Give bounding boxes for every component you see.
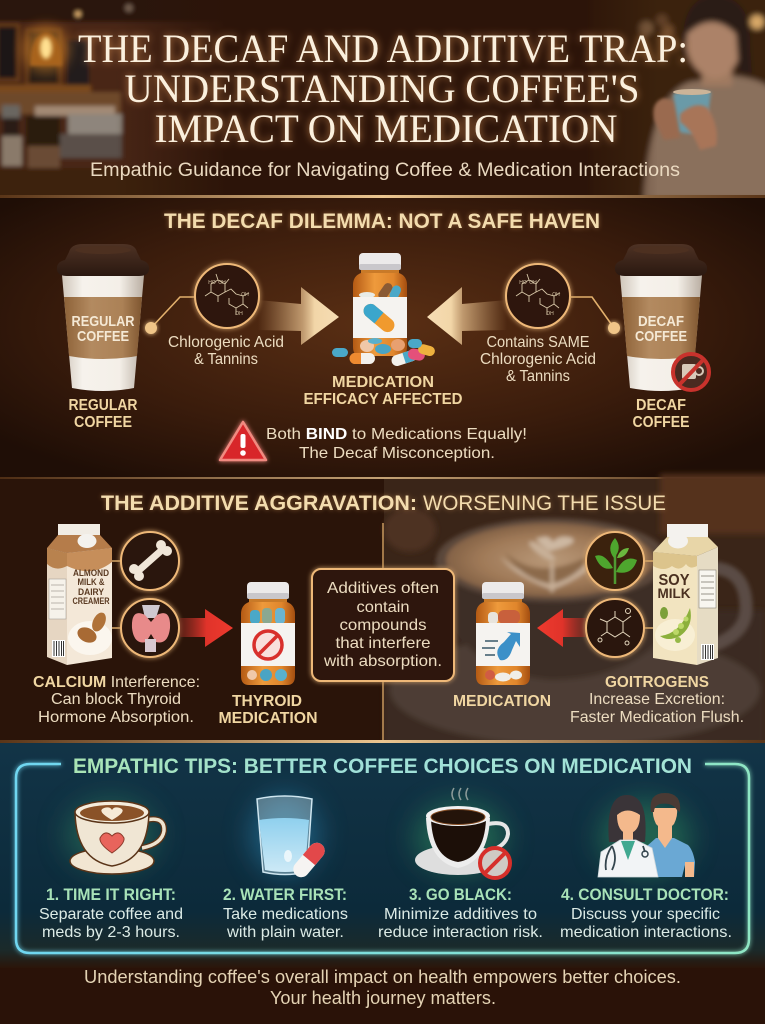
- contains same text: Contains SAME: [486, 334, 590, 351]
- goitrogens text: Faster Medication Flush.: [570, 709, 744, 726]
- bone icon circle: [112, 532, 179, 628]
- regular coffee label: REGULAR: [68, 397, 138, 414]
- contains same text: [480, 334, 596, 385]
- tip 4: Discuss your specific: [571, 906, 720, 923]
- calcium text: [33, 674, 200, 726]
- panel: footer: [0, 967, 765, 1024]
- subtitle: Empathic Guidance for Navigating Coffee & Medication Interactions: [90, 160, 680, 181]
- soy milk carton: SOY: [658, 572, 690, 589]
- goitrogens text: [570, 674, 744, 726]
- molecule circle right: [506, 264, 570, 328]
- divider: [0, 740, 765, 743]
- goitrogens text: Increase Excretion:: [589, 691, 725, 708]
- tip 4: [560, 885, 732, 941]
- tip 1: Separate coffee and: [39, 906, 183, 923]
- fade overlay into title area: [0, 0, 765, 196]
- title: [78, 26, 688, 151]
- thyroid medication label: THYROID: [232, 693, 302, 710]
- footer text: [84, 967, 681, 1008]
- man: [647, 793, 695, 877]
- callout box: [312, 569, 454, 681]
- latte background photo: [384, 474, 765, 746]
- warning text: Both BIND to Medications Equally!: [266, 426, 527, 443]
- molecule circle left: OH: [241, 292, 249, 298]
- red arrow left: [180, 609, 233, 647]
- tip 1: [39, 885, 183, 941]
- heading: WORSENING THE ISSUE: [423, 492, 666, 515]
- tips frame: [16, 764, 749, 953]
- panel: the additive aggravation: [0, 474, 765, 746]
- icon: glass of water with pill: [257, 796, 328, 880]
- medication bottle with arrow: [476, 582, 530, 685]
- title: IMPACT ON MEDICATION: [154, 106, 618, 151]
- regular coffee label: [68, 397, 138, 431]
- heading: THE ADDITIVE AGGRAVATION:: [101, 492, 417, 515]
- molecule circle left: HO: [208, 280, 216, 286]
- contains same text: & Tannins: [506, 368, 570, 385]
- tip 4: medication interactions.: [560, 924, 732, 941]
- footer text: Understanding coffee's overall impact on health empowers better choices.: [84, 967, 681, 987]
- footer text: Your health journey matters.: [270, 988, 496, 1008]
- thyroid medication bottle: [241, 582, 295, 685]
- tip 2: Take medications: [223, 906, 348, 923]
- divider: [0, 477, 765, 479]
- panel: empathic tips: [0, 743, 765, 968]
- icon: coffee with heart: [70, 801, 164, 874]
- tip 2: [223, 885, 348, 941]
- warning text: The Decaf Misconception.: [299, 445, 495, 462]
- thyroid medication label: MEDICATION: [218, 710, 318, 727]
- tip 3: 3. GO BLACK:: [409, 885, 512, 904]
- tip 3: [378, 885, 543, 941]
- calcium text: Hormone Absorption.: [38, 709, 194, 726]
- tip 1: meds by 2-3 hours.: [42, 924, 180, 941]
- medication efficacy label: MEDICATION: [332, 374, 434, 391]
- panel: header: [0, 0, 765, 200]
- tip 3: reduce interaction risk.: [378, 924, 543, 941]
- molecule circle left: OH: [235, 311, 243, 317]
- soy milk carton: [653, 524, 718, 665]
- divider: [0, 195, 765, 198]
- molecule circle left: OH: [218, 280, 226, 286]
- regular coffee cup: COFFEE: [77, 328, 129, 345]
- callout box: with absorption.: [323, 653, 442, 670]
- molecule circle right: HO: [519, 280, 527, 286]
- decaf coffee label: COFFEE: [632, 414, 690, 431]
- medication efficacy label: [304, 374, 462, 408]
- decaf coffee label: [632, 397, 690, 431]
- chlorogenic text left: Chlorogenic Acid: [168, 334, 284, 351]
- warning icon: [220, 422, 266, 460]
- title: UNDERSTANDING COFFEE'S: [124, 66, 640, 111]
- thyroid medication label: [218, 693, 318, 727]
- tip 2: 2. WATER FIRST:: [223, 885, 347, 904]
- tip 3: Minimize additives to: [384, 906, 537, 923]
- regular coffee label: COFFEE: [74, 414, 132, 431]
- medication label: MEDICATION: [453, 693, 551, 710]
- heading: THE DECAF DILEMMA: NOT A SAFE HAVEN: [164, 210, 600, 233]
- decaf coffee cup: COFFEE: [635, 328, 687, 345]
- woman holding a mug: [590, 0, 765, 200]
- thyroid icon circle: [121, 599, 179, 657]
- tip 4: 4. CONSULT DOCTOR:: [561, 885, 729, 904]
- almond milk carton: MILK &: [78, 577, 105, 588]
- loose pills: [332, 339, 436, 367]
- red arrow right: [537, 609, 588, 647]
- molecule circle right: OH: [529, 280, 537, 286]
- connector right: [570, 297, 614, 328]
- heading: [101, 492, 666, 515]
- center vertical divider: [382, 523, 384, 740]
- heading: EMPATHIC TIPS: BETTER COFFEE CHOICES ON MEDICATION: [73, 755, 692, 778]
- medication bottle with pills: [332, 253, 436, 367]
- callout box: that interfere: [336, 635, 431, 652]
- tip 2: with plain water.: [226, 924, 344, 941]
- woman doctor: [598, 795, 658, 877]
- arrow left: [427, 287, 507, 345]
- contains same text: Chlorogenic Acid: [480, 351, 596, 368]
- icon: doctor and nurse: [598, 793, 695, 877]
- warning text: [266, 426, 527, 462]
- decaf coffee cup: DECAF: [638, 313, 684, 330]
- icon glows: [65, 795, 691, 876]
- almond milk carton: DAIRY: [78, 587, 105, 598]
- callout box: compounds: [340, 617, 426, 634]
- panel: the decaf dilemma: [0, 198, 765, 478]
- regular coffee cup: [57, 244, 149, 391]
- decaf coffee label: DECAF: [636, 397, 686, 414]
- callout box: contain: [356, 599, 410, 616]
- chlorogenic text left: & Tannins: [194, 351, 258, 368]
- title: THE DECAF AND ADDITIVE TRAP:: [78, 26, 688, 71]
- plant icon circle: [586, 532, 654, 628]
- chlorogenic text left: [168, 334, 284, 368]
- almond milk carton: [47, 524, 112, 665]
- soy milk carton: MILK: [658, 585, 690, 601]
- molecule circle left: [195, 264, 259, 328]
- regular coffee cup: REGULAR: [72, 313, 135, 330]
- molecule circle right: OH: [546, 311, 554, 317]
- calcium text: CALCIUM Interference:: [33, 674, 200, 691]
- molecule icon circle: [586, 599, 644, 657]
- almond milk carton: CREAMER: [72, 596, 110, 607]
- capsule: [361, 301, 397, 335]
- callout box: Additives often: [327, 580, 439, 597]
- medication efficacy label: EFFICACY AFFECTED: [304, 391, 462, 408]
- goitrogens text: GOITROGENS: [605, 674, 709, 691]
- tip 1: 1. TIME IT RIGHT:: [46, 885, 176, 904]
- calcium text: Can block Thyroid: [51, 691, 181, 708]
- almond milk carton: ALMOND: [73, 568, 109, 579]
- connector left: [151, 297, 196, 328]
- molecule circle right: OH: [552, 292, 560, 298]
- icon: black coffee with no additives badge: [415, 788, 510, 878]
- cafe background photo: [0, 0, 226, 200]
- no caffeine badge: [673, 354, 709, 390]
- decaf coffee cup: [615, 244, 707, 391]
- arrow right: [258, 287, 339, 345]
